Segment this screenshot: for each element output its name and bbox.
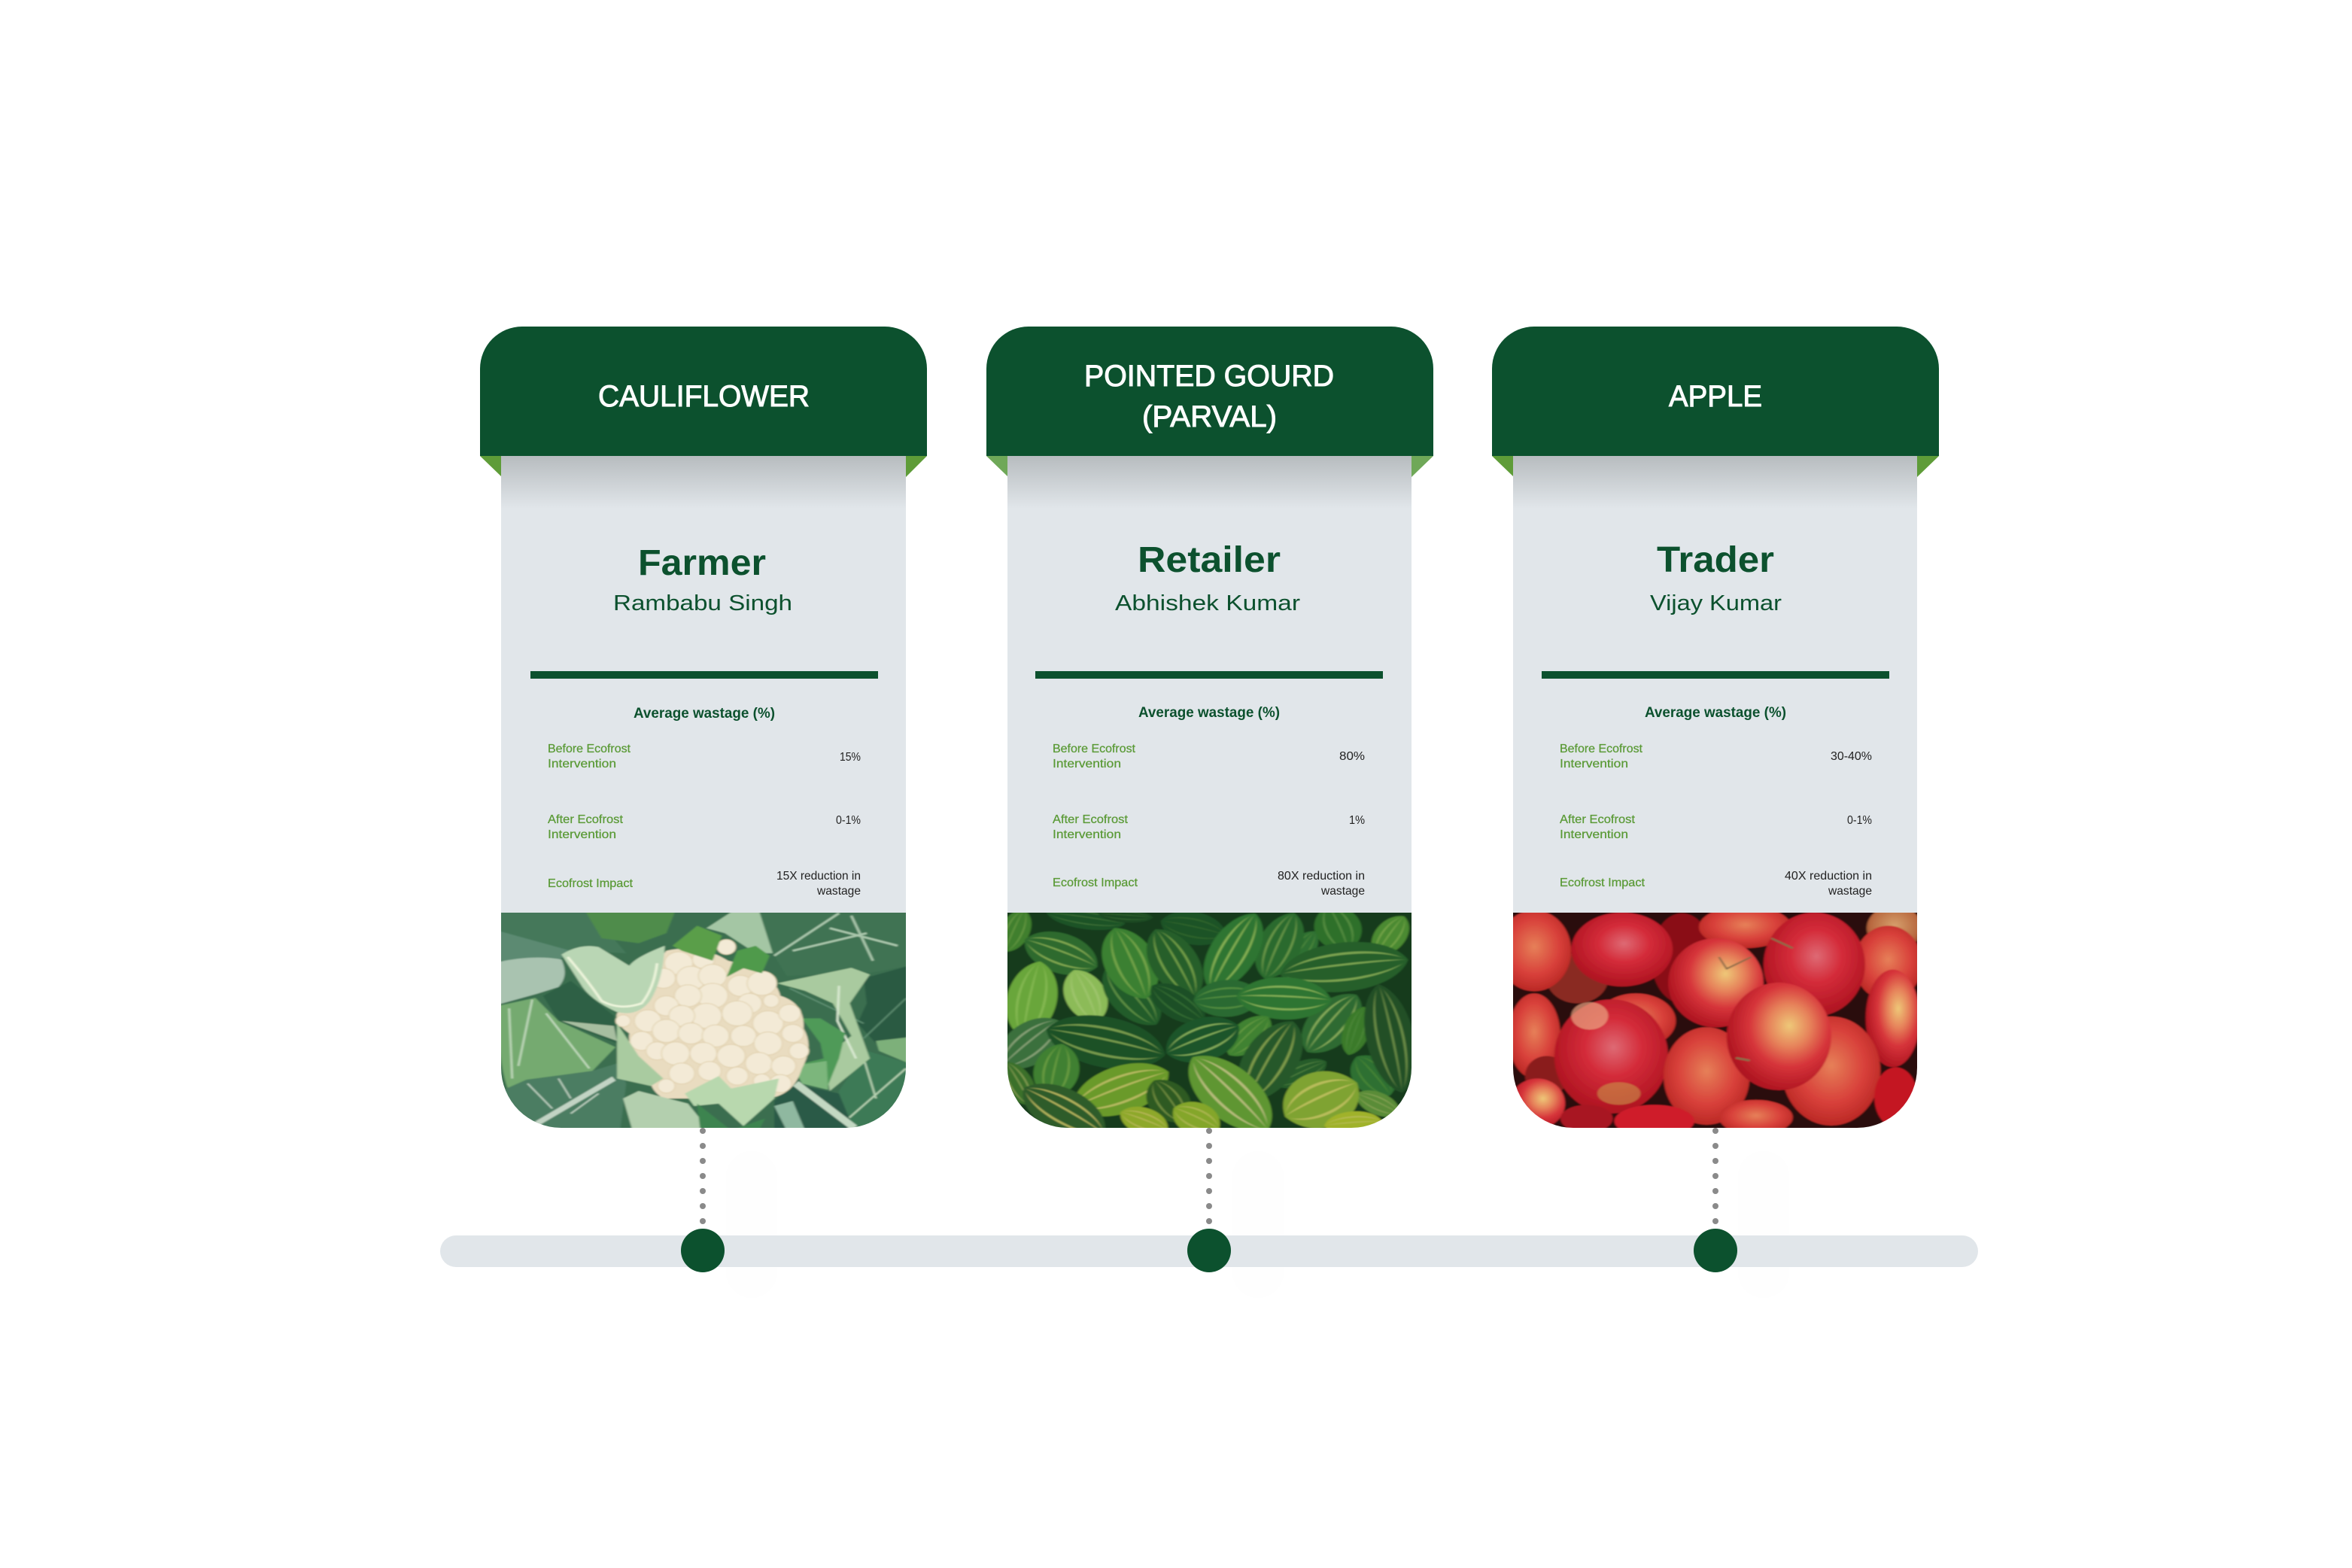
header: pointed gourd [986,327,1433,456]
data table: apple: Intervention [1560,828,1628,841]
photo: pointed gourd [1007,913,1412,1128]
data table: cauliflower: 0-1% [836,814,861,827]
connector dots [700,1128,706,1224]
data table: cauliflower: Before Ecofrost [548,743,631,755]
header: cauliflower [480,327,927,456]
divider bar [530,671,878,679]
data table: cauliflower: Ecofrost Impact [548,877,634,890]
data table: cauliflower: After Ecofrost [548,813,624,826]
curd [616,949,809,1099]
data table: cauliflower: 15X reduction in [776,870,861,883]
data table: pointed gourd: 1% [1349,814,1365,827]
data table: apple: wastage [1828,885,1872,898]
timeline [440,1229,1978,1272]
heading: average wastage: Average wastage (%) [634,706,775,722]
panel: pointed gourd details [1007,456,1412,915]
data table: apple: After Ecofrost [1560,813,1636,826]
data table: pointed gourd: 80% [1339,750,1365,763]
timeline node 3 [1694,1229,1737,1272]
heading: average wastage: Average wastage (%) [1138,705,1280,721]
connector dots [1712,1128,1718,1224]
data table: apple: 0-1% [1847,814,1872,827]
data table: cauliflower [548,743,861,898]
divider bar [1035,671,1383,679]
data table: pointed gourd [1053,743,1365,898]
timeline node 2 [1187,1229,1231,1272]
header ribbon tabs [480,456,927,477]
header: apple [1492,327,1939,456]
name: Vijay Kumar: Vijay Kumar [1650,591,1782,615]
data table: apple: Ecofrost Impact [1560,877,1645,889]
data table: pointed gourd: Ecofrost Impact [1053,877,1138,889]
header ribbon tabs [986,456,1433,477]
header ribbon tabs [1492,456,1939,477]
header: cauliflower: CAULIFLOWER [598,380,810,413]
heading: Retailer: Retailer [1138,540,1281,580]
data table: pointed gourd: After Ecofrost [1053,813,1129,826]
connector dots [1206,1128,1212,1224]
header: pointed gourd: (PARVAL) [1142,400,1277,433]
heading: Trader: Trader [1657,540,1774,580]
data table: apple: Before Ecofrost [1560,743,1643,755]
card: pointed gourd [985,327,1433,1224]
data table: pointed gourd: 80X reduction in [1278,870,1365,883]
timeline node 1 [681,1229,725,1272]
name: Rambabu Singh: Rambabu Singh [613,591,792,615]
panel: apple details [1513,456,1917,915]
data table: pointed gourd: wastage [1320,885,1365,898]
data table: cauliflower: Intervention [548,828,616,841]
panel: cauliflower details [501,456,906,915]
data table: cauliflower: wastage [816,885,861,898]
data table: pointed gourd: Intervention [1053,758,1121,770]
data table: apple: 40X reduction in [1785,870,1872,883]
card: cauliflower [480,327,927,1224]
card: apple [1492,327,1939,1224]
heading: Farmer: Farmer [638,543,766,583]
data table: cauliflower: Intervention [548,758,616,770]
photo: cauliflower [498,910,909,1130]
data table: apple: Intervention [1560,758,1628,770]
data table: cauliflower: 15% [840,751,861,764]
name: Abhishek Kumar: Abhishek Kumar [1115,591,1300,615]
divider bar [1542,671,1889,679]
data table: pointed gourd: Before Ecofrost [1053,743,1136,755]
photo: apple [1513,913,1917,1128]
header: apple: APPLE [1669,380,1762,413]
data table: pointed gourd: Intervention [1053,828,1121,841]
data table: apple: 30-40% [1831,750,1872,763]
heading: average wastage: Average wastage (%) [1645,705,1786,721]
header: pointed gourd: POINTED GOURD [1084,360,1334,393]
data table: apple [1560,743,1872,898]
